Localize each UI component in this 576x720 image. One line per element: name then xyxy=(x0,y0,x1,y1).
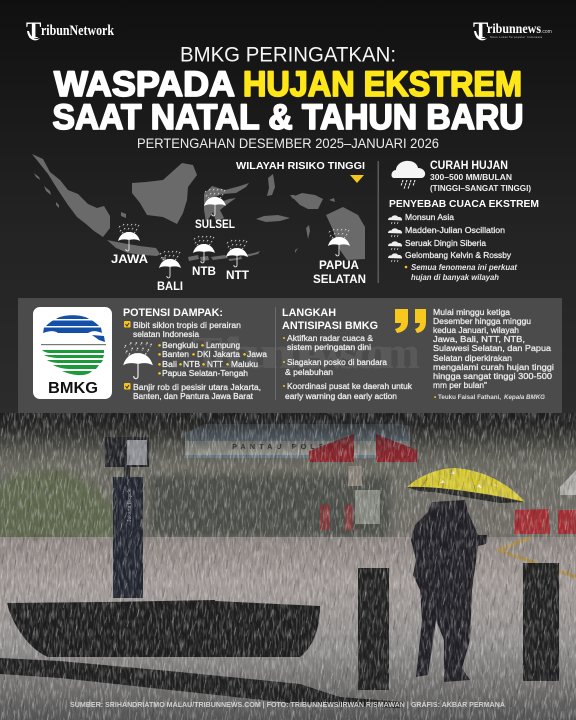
headline line 1: HUJAN EKSTREM xyxy=(243,65,522,104)
panel background xyxy=(18,298,562,413)
quote attribution: Kepala BMKG xyxy=(504,394,545,401)
bench xyxy=(7,600,320,657)
impact 2: Banjir rob di pesisir utara Jakarta, xyxy=(133,382,261,392)
logo: Tribunnews.com xyxy=(473,18,552,43)
road marking xyxy=(498,538,576,577)
info panel xyxy=(18,298,562,413)
rainfall block xyxy=(392,160,531,193)
region list: • xyxy=(202,359,205,369)
region list: Bali xyxy=(162,359,177,369)
small box xyxy=(348,466,362,486)
region list: • xyxy=(158,359,161,369)
icon: cloud 1 xyxy=(388,215,402,224)
quote: mengalami curah hujan tinggi xyxy=(433,362,554,372)
bullet 2 xyxy=(283,361,285,363)
region list: • xyxy=(158,340,161,350)
bushes xyxy=(0,469,113,537)
yellow umbrella xyxy=(407,468,525,503)
logo: Tribunnews.com: ribunnews xyxy=(487,22,541,37)
source credit: SUMBER: SRIHANDRIATMO MALAU/TRIBUNNEWS.COM | FOTO: TRIBUNNEWS/IRWAN RISMAWAN | GRAFIS: AKBAR PERMANA xyxy=(70,700,505,709)
rain: light streaks xyxy=(0,413,576,720)
Sumatra xyxy=(32,154,110,237)
note bullet xyxy=(405,266,407,268)
label Papua Selatan: PAPUA xyxy=(319,258,359,272)
quote: Sulawesi Selatan, dan Papua xyxy=(433,343,551,353)
label Jawa: JAWA xyxy=(111,252,148,266)
quote: Mulai minggu ketiga xyxy=(433,307,510,317)
action 1: Aktifkan radar cuaca & xyxy=(287,333,373,343)
bollard left xyxy=(358,568,389,690)
action 2: Siagakan posko di bandara xyxy=(287,357,387,367)
headline line 2: SAAT NATAL & TAHUN BARU xyxy=(52,98,524,137)
icon: cloud 2 xyxy=(388,228,402,237)
white vehicle xyxy=(560,470,576,495)
icon: rain cloud xyxy=(392,161,425,189)
logo: TribunNetwork xyxy=(26,18,115,43)
date range: PERTENGAHAN DESEMBER 2025–JANUARI 2026 xyxy=(137,135,439,151)
quote: hingga sangat tinggi 300-500 xyxy=(433,371,552,381)
action 3: Koordinasi pusat ke daerah untuk xyxy=(287,381,413,391)
tree band xyxy=(150,475,390,537)
parking sign: Jakarta Bicycle xyxy=(127,488,133,522)
Sulawesi xyxy=(204,183,249,222)
quote: kedua Januari, wilayah xyxy=(433,325,519,335)
checkbox 2 xyxy=(124,383,130,390)
note: Semua fenomena ini perkuat xyxy=(411,263,517,272)
region list: Lampung xyxy=(206,340,240,350)
impact column xyxy=(123,307,267,401)
BMKG logo card xyxy=(33,307,112,399)
checkbox 1 xyxy=(124,321,130,328)
Maluku xyxy=(256,174,310,253)
red barriers xyxy=(320,505,576,534)
title block xyxy=(52,44,524,151)
BMKG logo card: BMKG xyxy=(48,380,98,397)
note: hujan di banyak wilayah xyxy=(411,273,499,282)
cause 3: Seruak Dingin Siberia xyxy=(405,238,486,248)
region list: • xyxy=(201,340,204,350)
impact 1: selatan Indonesia xyxy=(133,329,199,339)
action 1: sistem peringatan dini xyxy=(287,342,371,352)
cause 2: Madden-Julian Oscillation xyxy=(405,225,505,235)
rain: dark streaks xyxy=(0,413,576,720)
rain: noise dark xyxy=(0,413,576,720)
region list: • xyxy=(243,349,246,359)
Kalimantan xyxy=(132,163,197,224)
action 3: early warning dan early action xyxy=(285,391,397,401)
quote: Desember hingga minggu xyxy=(433,316,531,326)
kicker: BMKG PERINGATKAN: xyxy=(180,44,396,66)
map of Indonesia xyxy=(32,154,365,261)
logo: Tribunnews.com: T xyxy=(473,18,488,43)
bullet 3 xyxy=(283,385,285,387)
icon: quotation marks xyxy=(395,309,426,333)
region list: • xyxy=(226,359,229,369)
logo: Tribunnews.com: .com xyxy=(541,29,552,35)
label Bali: BALI xyxy=(157,279,183,293)
map heading: WILAYAH RISIKO TINGGI xyxy=(236,160,365,172)
action 2: & pelabuhan xyxy=(285,367,333,377)
region list: Papua Selatan-Tengah xyxy=(162,368,248,378)
bullet 1 xyxy=(283,337,285,339)
Java xyxy=(107,240,160,256)
rainfall heading: CURAH HUJAN xyxy=(430,160,508,172)
divider xyxy=(378,161,379,283)
label Sulsel: SULSEL xyxy=(195,217,235,231)
watermark: Tribunnews.com xyxy=(192,327,420,378)
icon: rain umbrella xyxy=(123,342,153,379)
causes list xyxy=(388,198,539,282)
quote: Jawa, Bali, NTT, NTB, xyxy=(433,334,525,344)
region list: Jawa xyxy=(247,349,267,359)
icon: umbrella Sulsel xyxy=(204,189,226,216)
Nusa Tenggara xyxy=(162,251,260,261)
region list: Maluku xyxy=(231,359,258,369)
kiosk box xyxy=(355,490,380,524)
logo: Tribunnews.com: Situs Lokal Terpopuler Indonesia xyxy=(490,35,542,39)
parking sign xyxy=(105,437,149,598)
background upper xyxy=(0,424,576,537)
photo: rainy street xyxy=(0,413,576,720)
icon: umbrella Bali xyxy=(159,251,181,278)
shop banner xyxy=(185,424,410,458)
bollard right xyxy=(523,563,559,681)
region list: Banten xyxy=(162,349,189,359)
region list: • xyxy=(179,359,182,369)
icon: cloud 3 xyxy=(388,241,402,250)
divider xyxy=(275,307,276,400)
quote: Selatan diperkirakan xyxy=(433,353,512,363)
ground xyxy=(0,537,576,720)
kerb xyxy=(0,658,404,708)
icon: umbrella Jawa xyxy=(118,224,140,251)
region list: DKI Jakarta xyxy=(197,349,240,359)
anticipation heading: ANTISIPASI BMKG xyxy=(282,320,378,332)
rainfall value: 300–500 MM/BULAN xyxy=(430,172,512,182)
icon: cloud 4 xyxy=(388,253,402,262)
region list: NTB xyxy=(183,359,200,369)
page background xyxy=(0,0,576,420)
region list: • xyxy=(192,349,195,359)
cause 4: Gelombang Kelvin & Rossby xyxy=(405,250,512,260)
impact 1: Bibit siklon tropis di perairan xyxy=(133,320,241,330)
anticipation heading: LANGKAH xyxy=(282,307,336,319)
top fade xyxy=(0,416,576,450)
anticipation column xyxy=(282,307,413,401)
label Papua Selatan: SELATAN xyxy=(313,272,366,286)
icon: umbrella NTT xyxy=(226,240,248,267)
region list: Bengkulu xyxy=(162,340,198,350)
quote attribution: Teuku Faisal Fathani, xyxy=(438,394,501,401)
quote: mm per bulan" xyxy=(433,380,487,390)
region list: • xyxy=(158,368,161,378)
causes heading: PENYEBAB CUACA EKSTREM xyxy=(389,198,539,210)
logo: TribunNetwork: T xyxy=(26,18,41,43)
awning xyxy=(309,434,417,462)
impact heading: POTENSI DAMPAK: xyxy=(123,307,223,319)
logo: TribunNetwork: ribunNetwork xyxy=(41,23,115,39)
icon: umbrella Papua xyxy=(328,229,350,256)
person xyxy=(411,500,487,682)
marker triangle xyxy=(350,175,364,183)
region list xyxy=(158,340,267,378)
region labels xyxy=(111,217,366,293)
rain: noise light xyxy=(0,413,576,720)
Papua xyxy=(292,193,365,260)
impact 2: Banten, dan Pantura Jawa Barat xyxy=(133,391,254,401)
region list: • xyxy=(158,349,161,359)
quote attribution: • xyxy=(434,394,437,401)
shop banner: PANTAU POLSEK xyxy=(232,442,343,451)
region list: NTT xyxy=(207,359,224,369)
icon: umbrella NTB xyxy=(193,236,215,263)
cause 1: Monsun Asia xyxy=(405,212,454,222)
label NTT: NTT xyxy=(226,268,250,282)
rainfall category: (TINGGI–SANGAT TINGGI) xyxy=(430,183,531,193)
label NTB: NTB xyxy=(192,264,216,278)
headline line 1: WASPADA xyxy=(54,65,235,104)
